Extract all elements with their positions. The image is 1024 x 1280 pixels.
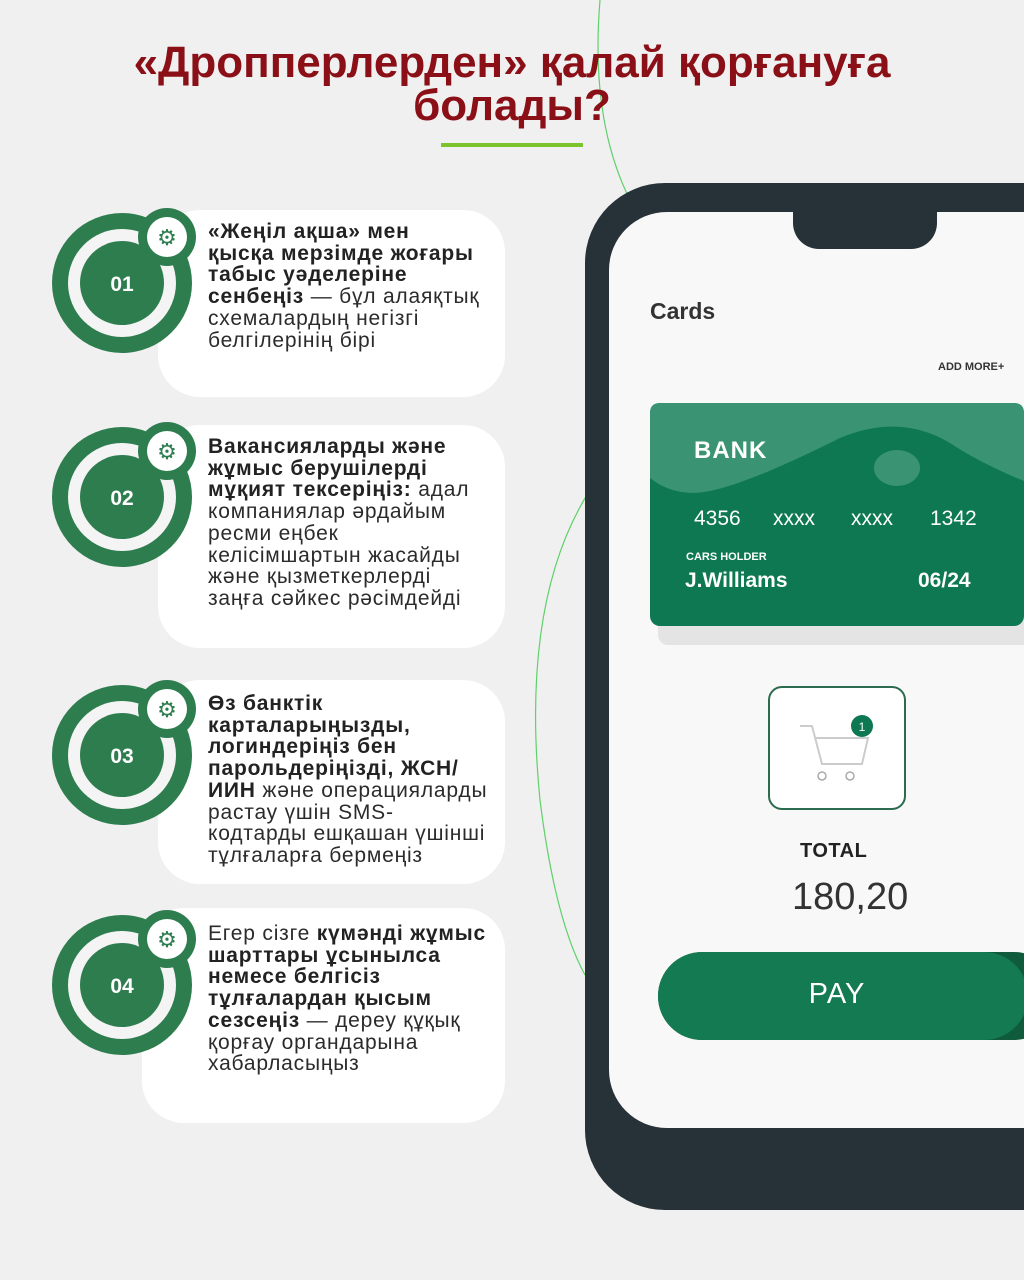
bank card: [650, 403, 1024, 645]
text: ⚙: [157, 697, 177, 722]
total: TOTAL: [800, 840, 867, 862]
bank card: BANK: [694, 437, 767, 464]
text: қысқа мерзімде жоғары: [208, 242, 474, 265]
item 3: [52, 680, 505, 884]
notch: [793, 183, 937, 249]
bank card: xxxx: [851, 507, 893, 530]
text: шарттары ұсынылса: [208, 944, 441, 967]
text: немесе белгісіз: [208, 965, 381, 988]
text: 01: [110, 273, 134, 296]
phone label: Cards: Cards: [650, 298, 715, 324]
pay button: PAY: [809, 978, 865, 1010]
text: кодтарды ешқашан үшінші: [208, 822, 485, 845]
bank card: 1342: [930, 507, 977, 530]
text: белгілерінің бірі: [208, 329, 376, 352]
text: және қызметкерлерді: [208, 565, 431, 588]
bank card: CARS HOLDER: [686, 551, 767, 563]
total amount: 180,20: [792, 876, 908, 918]
text: компаниялар әрдайым: [208, 500, 446, 523]
text: мұқият тексеріңіз: адал: [208, 478, 469, 501]
text: ⚙: [157, 927, 177, 952]
bank card: J.Williams: [685, 569, 788, 592]
text: растау үшін SMS-: [208, 801, 394, 824]
bank card: xxxx: [773, 507, 815, 530]
text: сенбеңіз — бұл алаяқтық: [208, 285, 479, 308]
bank card: 4356: [694, 507, 741, 530]
title: болады?: [413, 81, 611, 130]
item 4: [52, 908, 505, 1123]
cart icon: 1: [859, 720, 866, 734]
text: ресми еңбек: [208, 522, 339, 545]
text: келісімшартын жасайды: [208, 544, 461, 567]
text: заңға сәйкес рәсімдейді: [208, 587, 461, 610]
text: тұлғалардан қысым: [208, 987, 432, 1010]
text: Егер сізге күмәнді жұмыс: [208, 922, 486, 945]
text: жұмыс берушілерді: [208, 457, 428, 480]
text: парольдеріңізді, ЖСН/: [208, 757, 459, 780]
text: 03: [110, 745, 134, 768]
text: ИИН және операцияларды: [208, 779, 487, 802]
item 2: [52, 422, 505, 648]
screen: [609, 212, 1024, 1128]
text: табыс уәделеріне: [208, 263, 407, 286]
title: [134, 38, 891, 130]
cart icon: [768, 686, 906, 810]
text: қорғау органдарына: [208, 1031, 418, 1054]
text: схемалардың негізгі: [208, 307, 419, 330]
text: ⚙: [157, 225, 177, 250]
text: 02: [110, 487, 134, 510]
text: Вакансияларды және: [208, 435, 446, 458]
text: логиндеріңіз бен: [208, 735, 397, 758]
text: Өз банктік: [208, 692, 323, 715]
title: «Дропперлерден» қалай қорғануға: [134, 38, 890, 87]
text: ⚙: [157, 439, 177, 464]
phone: [585, 183, 1024, 1210]
text: сезсеңіз — дереу құқық: [208, 1009, 460, 1032]
item 1: [52, 208, 505, 397]
title underline: [441, 143, 583, 147]
add more: ADD MORE+: [938, 361, 1004, 373]
text: карталарыңызды,: [208, 714, 411, 737]
text: тұлғаларға бермеңіз: [208, 844, 423, 867]
bank card: 06/24: [918, 569, 971, 592]
pay button: [658, 952, 1024, 1040]
text: 04: [110, 975, 134, 998]
text: «Жеңіл ақша» мен: [208, 220, 410, 243]
text: хабарласыңыз: [208, 1052, 360, 1075]
